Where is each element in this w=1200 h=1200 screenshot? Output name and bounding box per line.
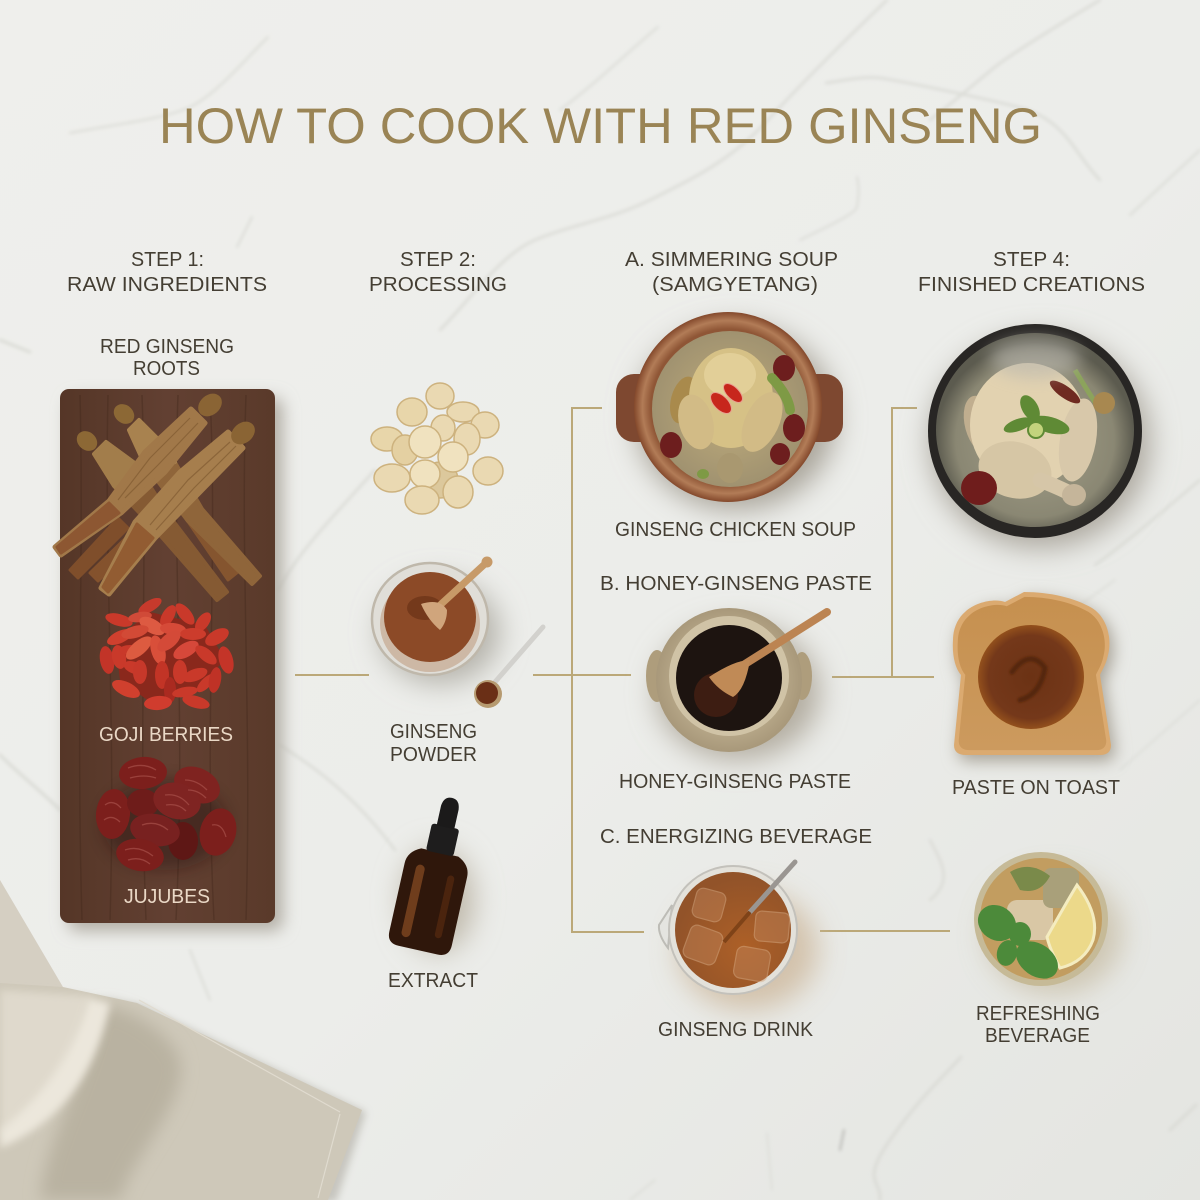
jujubes <box>94 755 242 875</box>
heading: step 3 simmering soup <box>625 249 838 296</box>
heading: step 4 <box>918 249 1145 296</box>
label: paste on toast: PASTE ON TOAST <box>952 777 1120 799</box>
icon: ginseng drink glass <box>659 862 818 1010</box>
heading: step 2: STEP 2: <box>400 249 476 271</box>
label: step c energizing beverage: C. ENERGIZING BEVERAGE <box>600 826 872 848</box>
connector lines <box>295 408 950 932</box>
label: red ginseng roots: ROOTS <box>133 358 200 380</box>
heading: step 4: FINISHED CREATIONS <box>918 274 1145 296</box>
icon: powder jar with spoon <box>372 556 500 684</box>
label: extract: EXTRACT <box>388 970 478 992</box>
label: jujubes: JUJUBES <box>124 886 210 908</box>
icon: black bowl soup <box>928 324 1150 548</box>
heading: step 3 simmering soup: A. SIMMERING SOUP <box>625 249 838 271</box>
label: ginseng powder <box>390 721 477 766</box>
jujube <box>961 471 997 505</box>
jujubes in soup <box>660 355 805 465</box>
icon: refreshing beverage glass <box>971 852 1122 994</box>
goji berries <box>98 595 236 711</box>
linen cloth <box>0 880 366 1200</box>
label: step b honey-ginseng paste: B. HONEY-GINSENG PASTE <box>600 573 872 595</box>
green herb garnish <box>1002 392 1071 438</box>
icon: measuring spoon <box>474 627 543 708</box>
label: red ginseng roots <box>100 336 234 380</box>
icon: extract dropper bottle <box>387 791 483 957</box>
label: refreshing beverage: BEVERAGE <box>985 1025 1090 1047</box>
heading: step 2 <box>369 249 507 296</box>
steam <box>990 338 1080 378</box>
label: honey-ginseng paste: HONEY-GINSENG PASTE <box>619 771 851 793</box>
title: HOW TO COOK WITH RED GINSENG <box>159 98 1042 154</box>
label: goji berries: GOJI BERRIES <box>99 724 233 746</box>
mint leaves <box>971 898 1065 986</box>
lemon slice <box>1047 885 1095 968</box>
icon: toast with paste <box>953 592 1115 761</box>
label: ginseng powder: GINSENG <box>390 721 477 743</box>
label: red ginseng roots: RED GINSENG <box>100 336 234 358</box>
label: ginseng drink: GINSENG DRINK <box>658 1019 814 1041</box>
heading: step 2: PROCESSING <box>369 274 507 296</box>
icon: honey ginseng pot <box>646 608 827 760</box>
heading: step 1: RAW INGREDIENTS <box>67 274 267 296</box>
label: refreshing beverage <box>976 1003 1100 1047</box>
label: ginseng chicken soup: GINSENG CHICKEN SOUP <box>615 519 856 541</box>
chicken <box>665 348 791 483</box>
label: refreshing beverage: REFRESHING <box>976 1003 1100 1025</box>
chili slices <box>707 380 746 417</box>
chicken <box>958 363 1103 507</box>
icon: clay pot soup <box>616 312 843 510</box>
heading: step 3 simmering soup: (SAMGYETANG) <box>652 274 818 296</box>
icon: ginseng slices <box>371 383 503 514</box>
heading: step 1: STEP 1: <box>131 249 204 271</box>
label: ginseng powder: POWDER <box>390 744 477 766</box>
heading: step 4: STEP 4: <box>993 249 1070 271</box>
heading: step 1 <box>67 249 267 296</box>
ginseng roots <box>55 389 260 600</box>
panel: wooden board <box>55 389 283 931</box>
